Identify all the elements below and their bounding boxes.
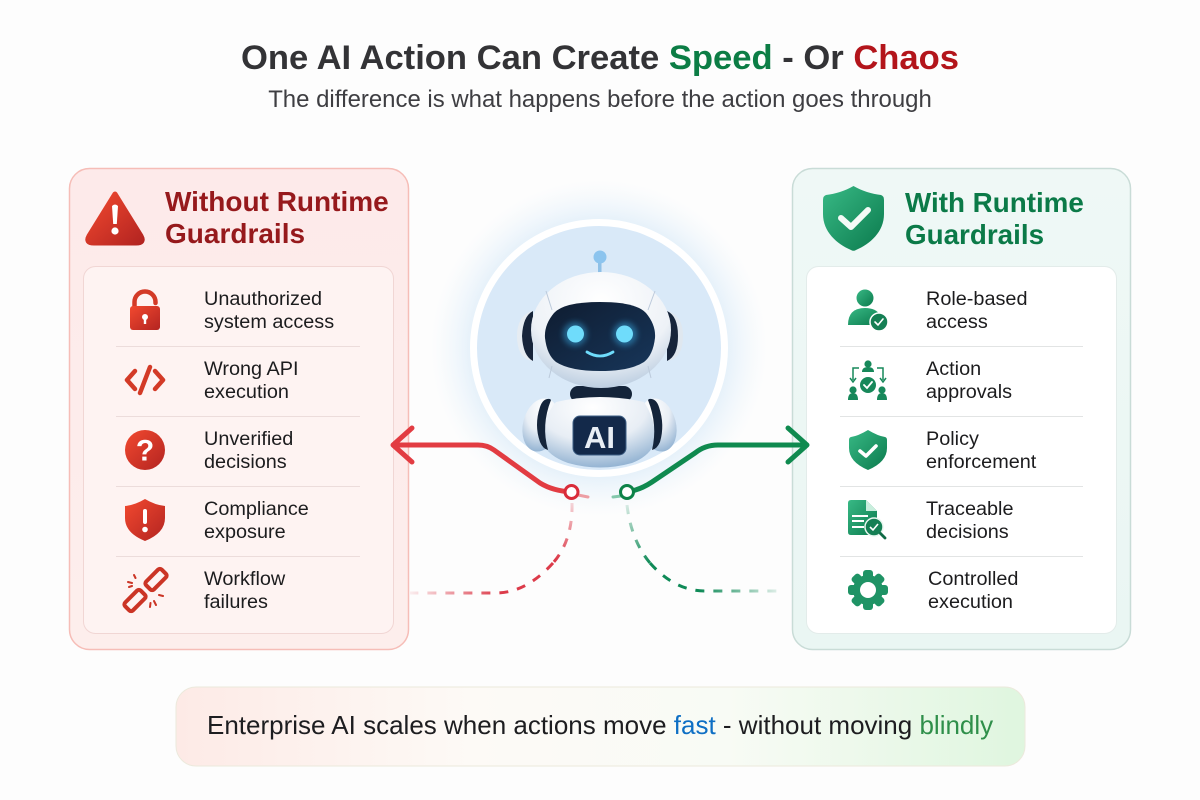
robot medallion — [431, 180, 767, 516]
item: wrong API execution — [127, 358, 298, 403]
item: controlled execution: execution — [928, 591, 1013, 613]
panel heading: with runtime guardrails: With Runtime — [905, 187, 1084, 218]
icon: approval flow — [848, 360, 887, 400]
item: unauthorized system access — [130, 288, 334, 333]
item: action approvals: approvals — [926, 381, 1012, 403]
robot head seams — [546, 291, 655, 378]
icon: question mark: ? — [136, 434, 154, 468]
robot antenna — [594, 250, 606, 274]
item: compliance exposure — [125, 498, 309, 543]
robot body — [537, 397, 662, 468]
banner text: Enterprise AI scales when actions move fast - without moving blindly — [207, 710, 993, 740]
item: policy enforcement — [849, 428, 1037, 473]
icon: gear — [848, 570, 888, 610]
item: policy enforcement: enforcement — [926, 451, 1037, 473]
item: wrong API execution: Wrong API — [204, 358, 298, 380]
panel: without runtime guardrails — [70, 168, 408, 650]
item: compliance exposure: Compliance — [204, 498, 309, 520]
item: unverified decisions: decisions — [204, 451, 287, 473]
item: policy enforcement: Policy — [926, 428, 979, 450]
panel heading: without runtime guardrails: Without Runtime — [165, 186, 389, 217]
panel: with runtime guardrails — [792, 168, 1130, 650]
item: traceable decisions: Traceable — [926, 498, 1014, 520]
item: action approvals: Action — [926, 358, 981, 380]
robot — [517, 250, 683, 468]
icon: broken chain — [123, 568, 168, 612]
item: traceable decisions — [848, 498, 1014, 543]
item: unauthorized system access: Unauthorized — [204, 288, 322, 310]
item: controlled execution: Controlled — [928, 568, 1018, 590]
robot neck — [570, 386, 632, 402]
item: workflow failures: Workflow — [204, 568, 286, 590]
item: controlled execution — [848, 568, 1018, 613]
icon: open padlock — [130, 292, 160, 330]
subtitle: The difference is what happens before the action goes through — [268, 86, 932, 113]
icon: alert shield — [125, 499, 165, 541]
item: unauthorized system access: system access — [204, 311, 334, 333]
list card: controls — [806, 266, 1116, 634]
dashed connector: green — [627, 505, 780, 591]
item: role-based access: Role-based — [926, 288, 1028, 310]
arrow: green to with panel — [613, 428, 807, 498]
list card: risks — [84, 266, 394, 634]
dashed connector: red — [410, 503, 572, 593]
arrow: red to without panel — [393, 428, 588, 498]
icon: check shield small — [849, 430, 887, 470]
icon: code brackets — [127, 367, 163, 393]
robot visor — [545, 302, 655, 371]
bottom banner — [176, 687, 1025, 766]
panel heading: with runtime guardrails: Guardrails — [905, 219, 1044, 250]
glow — [431, 180, 767, 516]
icon: question mark — [125, 430, 165, 470]
icon: check shield — [823, 186, 884, 251]
medallion circle — [474, 222, 724, 474]
item: compliance exposure: exposure — [204, 521, 286, 543]
item: traceable decisions: decisions — [926, 521, 1009, 543]
panel heading: without runtime guardrails: Guardrails — [165, 218, 305, 249]
item: workflow failures: failures — [204, 591, 268, 613]
item: wrong API execution: execution — [204, 381, 289, 403]
title: One AI Action Can Create Speed - Or Chaos — [241, 39, 959, 77]
icon: user with check — [848, 290, 888, 331]
icon: warning triangle — [88, 194, 142, 243]
robot arms — [517, 394, 682, 456]
item: unverified decisions: Unverified — [204, 428, 293, 450]
robot ears — [517, 311, 683, 361]
icon: document with magnifier — [848, 500, 885, 538]
item: action approvals — [848, 358, 1012, 403]
item: role-based access — [848, 288, 1028, 333]
item: unverified decisions — [125, 428, 293, 473]
item: role-based access: access — [926, 311, 988, 333]
robot head — [531, 272, 671, 388]
robot body: AI — [584, 420, 615, 455]
item: workflow failures — [123, 568, 286, 613]
